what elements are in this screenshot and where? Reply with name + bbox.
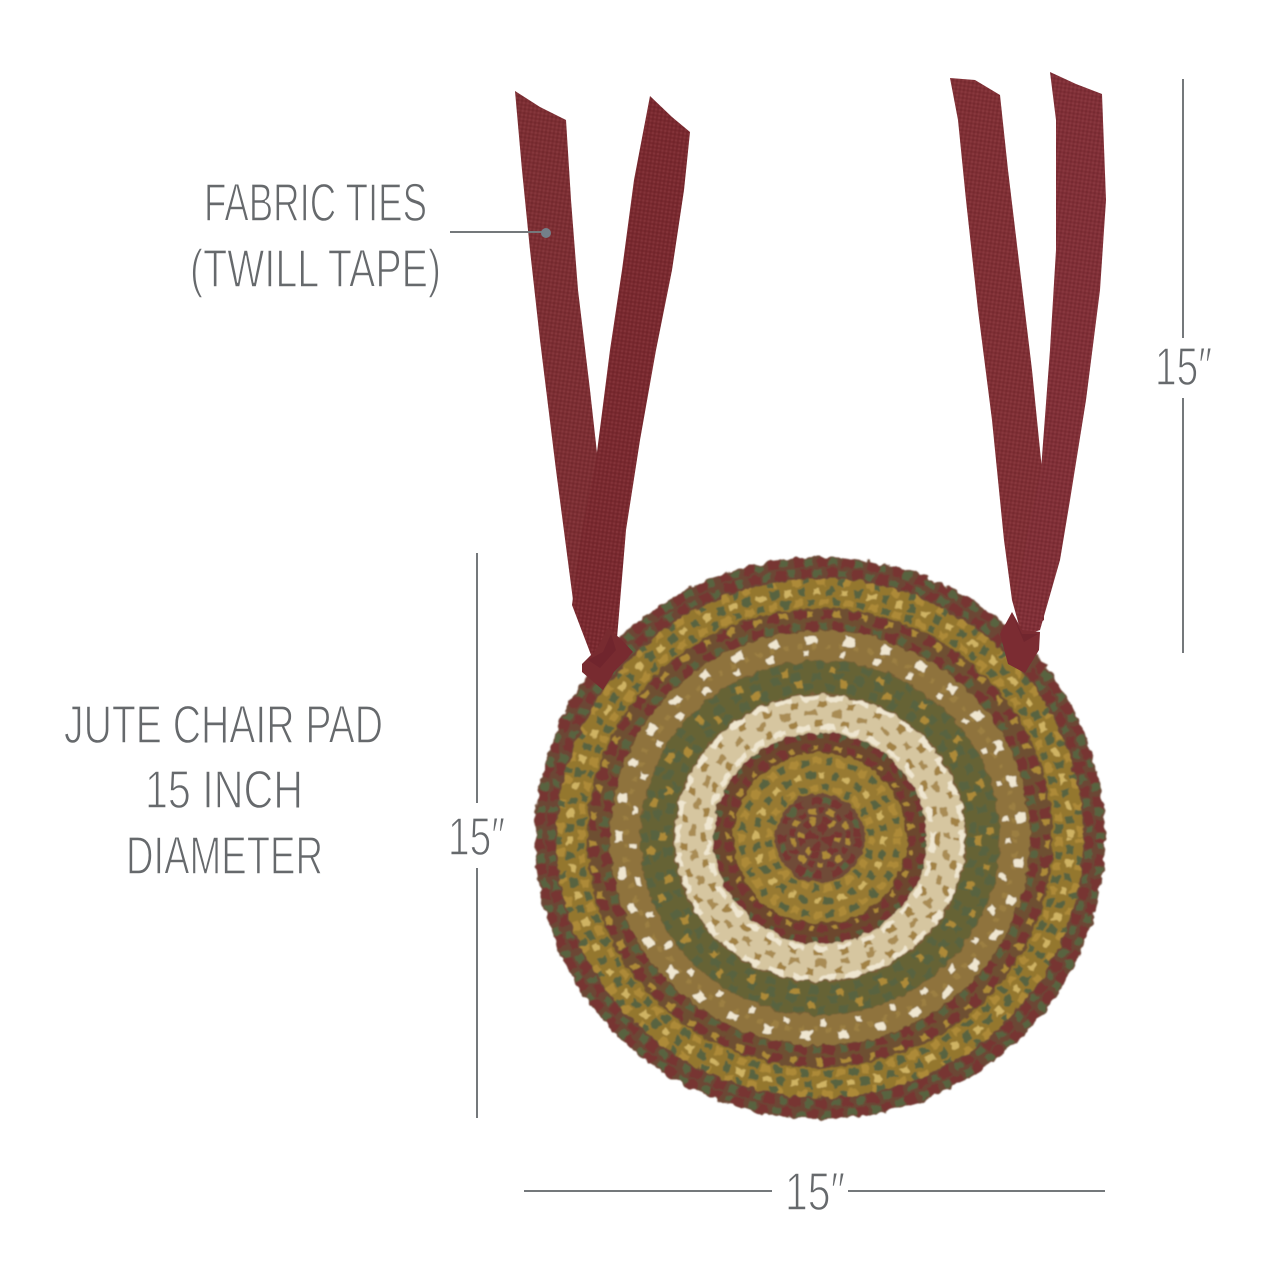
- callout: fabric ties: [190, 173, 551, 299]
- description line 2: 15 INCH: [145, 760, 303, 820]
- callout text: twill tape line 2: (TWILL TAPE): [190, 239, 441, 299]
- description line 3: DIAMETER: [126, 826, 323, 886]
- braided jute chair pad: [535, 557, 1105, 1119]
- band: centre braid: [782, 801, 858, 875]
- band: burgundy and green braid: [593, 614, 1047, 1062]
- dimension: pad height 15 inches: 15″: [448, 807, 505, 867]
- band: inner burgundy braid: [716, 735, 924, 941]
- band: outer burgundy edge braid: [540, 562, 1100, 1114]
- fabric tie: right pair: [950, 72, 1106, 636]
- description line 1: JUTE CHAIR PAD: [64, 695, 383, 755]
- callout leader line and dot: [450, 228, 551, 238]
- left tie strap B: [572, 96, 690, 668]
- dimension: pad width 15 inches: 15″: [785, 1162, 845, 1222]
- fabric tie: left pair: [515, 91, 690, 668]
- band: inner gold braid: [742, 761, 898, 915]
- band: green braid: [645, 665, 995, 1011]
- knot: left tie over pad edge: [582, 628, 633, 690]
- knot: right tie over pad edge: [1000, 612, 1040, 673]
- callout text: fabric ties line 1: FABRIC TIES: [204, 173, 427, 233]
- product description: [64, 695, 383, 886]
- dimension: tie length 15 inches: 15″: [1155, 337, 1212, 397]
- right tie strap A: [950, 78, 1044, 636]
- left tie strap A: [515, 91, 616, 668]
- band: white-flecked braid: [619, 640, 1021, 1036]
- band: outer gold braid: [560, 582, 1080, 1094]
- band: cream braid: [678, 698, 962, 978]
- right tie strap B: [1018, 72, 1106, 636]
